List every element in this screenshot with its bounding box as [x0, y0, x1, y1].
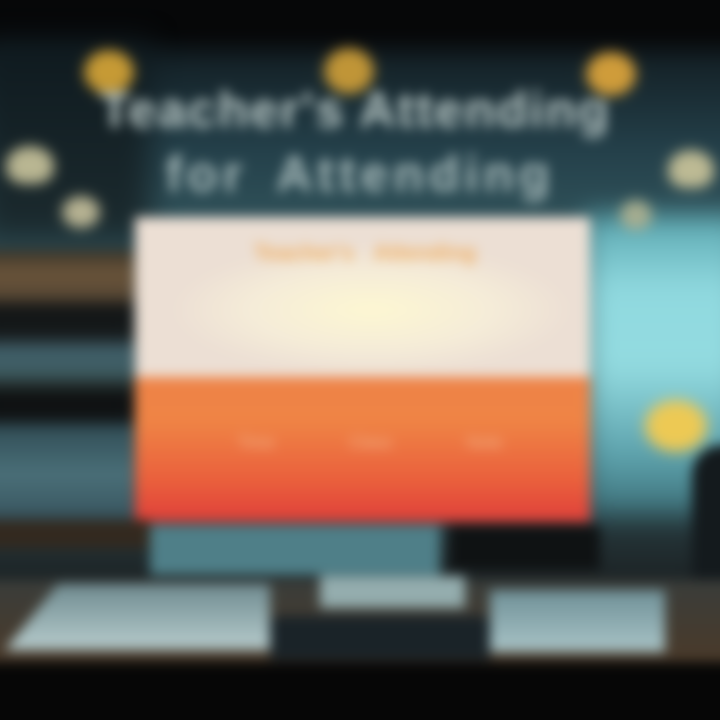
- icon: open book, centre page: [320, 576, 465, 608]
- panel: whiteboard lower orange-red section: [135, 377, 590, 522]
- icon: yellow glowing lamp, right: [645, 400, 707, 452]
- icon: lamp, right: [620, 200, 652, 230]
- icon: hanging lamp, top right: [586, 52, 636, 96]
- panel: dark block beside ledge: [450, 525, 600, 570]
- panel: desk surface: [0, 580, 720, 662]
- panel: bookshelf on the left: [0, 250, 135, 530]
- title: [94, 82, 614, 209]
- icon: open book, left page: [5, 584, 270, 650]
- heading: whiteboard orange heading: Teacher's Attending: [254, 240, 476, 265]
- panel: whiteboard upper cream section: [135, 217, 590, 377]
- icon: lamp, far left: [6, 146, 54, 184]
- panel: bottom black band: [0, 662, 720, 720]
- panel: teal ledge under whiteboard: [150, 525, 440, 575]
- icon: lamp, left: [62, 196, 100, 228]
- text block: whiteboard lower labels: Time Class Note: [237, 433, 502, 452]
- icon: dark figure silhouette, right: [692, 445, 720, 605]
- icon: hanging lamp, top left: [84, 50, 134, 94]
- icon: open book, right page: [490, 590, 665, 652]
- icon: lamp, far right: [668, 150, 714, 188]
- panel: dark left wall: [0, 40, 150, 240]
- panel: light blue wall on the right: [585, 215, 720, 515]
- panel: dark object on desk centre: [270, 616, 490, 660]
- title line 1: Teacher's Attending: [99, 82, 611, 138]
- title line 2: for Attending: [166, 146, 554, 202]
- panel: dark shelf under bookcase: [0, 520, 150, 548]
- icon: hanging lamp, top centre: [324, 48, 374, 94]
